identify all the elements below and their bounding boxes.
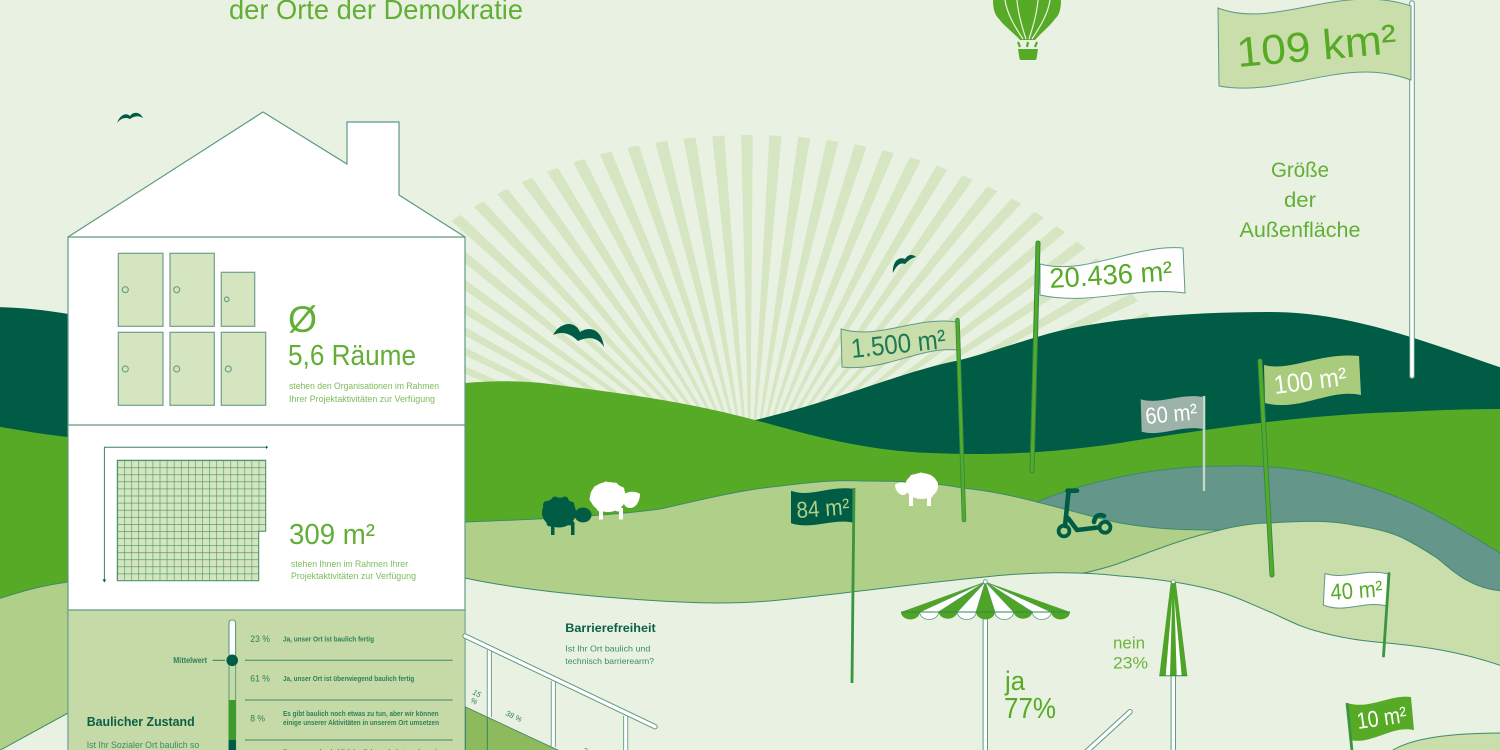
closed parasol canopy — [1159, 580, 1187, 676]
label: no: 23% — [1113, 654, 1148, 673]
pale hill — [1060, 521, 1500, 680]
house outline — [68, 112, 465, 750]
answer rows: einige unserer Aktivitäten in unserem Ort umsetzen — [283, 718, 439, 727]
answer rows: 23 % — [250, 634, 270, 644]
building condition heading: Baulicher Zustand — [87, 714, 195, 729]
flag: 84 m2 — [791, 488, 854, 683]
area caption: Projektaktivitäten zur Verfügung — [291, 571, 416, 582]
dark hill right — [755, 312, 1500, 500]
ramp fill — [466, 707, 560, 750]
icon: hot air balloon — [993, 0, 1061, 60]
area grid — [117, 460, 266, 581]
panel: area — [102, 446, 416, 582]
flag: 10 m2: 10 m² — [1355, 701, 1408, 734]
icon: white sheep left — [590, 482, 640, 520]
label: no — [1113, 634, 1148, 673]
dark hill left — [0, 307, 300, 450]
deck chair strut — [1086, 712, 1130, 750]
icon: scooter — [1059, 491, 1110, 536]
sun rays — [518, 310, 982, 670]
parasol canopy — [901, 580, 1070, 620]
flag: 84 m2: 84 m² — [796, 493, 851, 523]
green hill — [0, 381, 1500, 750]
ramp percentages: 15 — [471, 688, 483, 700]
flag: 100 m2: 100 m² — [1272, 361, 1348, 400]
open parasol — [901, 580, 1070, 750]
label: outdoor area size: Größe — [1271, 159, 1329, 182]
flag: 60 m2: 60 m² — [1144, 399, 1199, 429]
flag: 20.436 m2 — [1032, 243, 1185, 471]
panel: building condition — [68, 610, 465, 750]
parasol pole — [983, 615, 988, 750]
icon: doors — [118, 253, 266, 405]
small hill bottom right — [1390, 733, 1500, 750]
rooms caption: Ihrer Projektaktivitäten zur Verfügung — [289, 394, 435, 405]
answer rows — [250, 634, 439, 750]
rooms caption: stehen den Organisationen im Rahmen — [289, 381, 439, 392]
panel: rooms — [118, 253, 439, 405]
flag: 60 m2 — [1141, 396, 1204, 491]
accessibility question: technisch barrierearm? — [565, 656, 654, 666]
flag: 109 km2: 109 km² — [1235, 15, 1398, 76]
house — [68, 112, 465, 750]
light green hill — [0, 481, 1220, 750]
flag: 100 m2 — [1260, 355, 1361, 575]
icon: dark sheep — [542, 496, 592, 535]
label: outdoor area size — [1240, 159, 1360, 242]
area caption — [291, 559, 416, 582]
ramp percentages — [469, 688, 589, 750]
answer rows: Ja, unser Ort ist baulich fertig — [283, 634, 374, 644]
river — [1037, 466, 1500, 650]
accessibility ramp — [465, 636, 655, 750]
closed parasol pole — [1171, 676, 1176, 750]
ramp percentages: 38 % — [504, 709, 524, 724]
icon: bird top left — [117, 113, 143, 123]
icon: white sheep right — [895, 472, 938, 506]
answer rows: Es gibt baulich noch etwas zu tun, aber wir können — [283, 709, 439, 718]
flag: 20.436 m2: 20.436 m² — [1048, 256, 1173, 294]
dimension arrows — [104, 447, 266, 581]
label: yes — [1004, 666, 1056, 725]
label: yes: ja — [1004, 666, 1026, 696]
label: yes: 77% — [1004, 693, 1056, 725]
flag: 40 m2 — [1323, 572, 1389, 656]
flag: 109 km2 — [1218, 0, 1412, 376]
icon: bird right — [893, 255, 916, 273]
label: no: nein — [1113, 634, 1145, 653]
label: outdoor area size: Außenfläche — [1240, 219, 1360, 242]
flag: 10 m2 — [1347, 697, 1414, 750]
rooms caption — [289, 381, 439, 405]
foreground meadow — [0, 573, 1500, 750]
ramp percentages: % — [469, 696, 479, 707]
area caption: stehen Ihnen im Rahmen Ihrer — [291, 559, 408, 570]
posts — [487, 650, 626, 750]
answer rows: Ja, unser Ort ist überwiegend baulich fertig — [283, 674, 415, 683]
flag: 40 m2: 40 m² — [1330, 575, 1384, 605]
answer rows: 8 % — [250, 714, 265, 724]
mean label: Mittelwert — [173, 656, 207, 665]
thermometer scale — [226, 620, 238, 750]
handrail — [465, 636, 655, 727]
accessibility question: Ist Ihr Ort baulich und — [565, 644, 651, 654]
flag: 1.500 m2 — [841, 320, 964, 520]
flag: 1.500 m2: 1.500 m² — [849, 324, 947, 364]
label: outdoor area size: der — [1284, 189, 1316, 212]
answer rows: 61 % — [250, 674, 270, 684]
area figure: 309 m² — [289, 519, 375, 551]
rooms figure: 5,6 Räume — [288, 340, 416, 372]
heading: accessibility: Barrierefreiheit — [565, 621, 656, 635]
accessibility question — [565, 644, 654, 666]
icon: bird centre — [553, 324, 604, 347]
closed parasol — [1159, 580, 1187, 750]
average symbol: Ø — [288, 299, 317, 340]
